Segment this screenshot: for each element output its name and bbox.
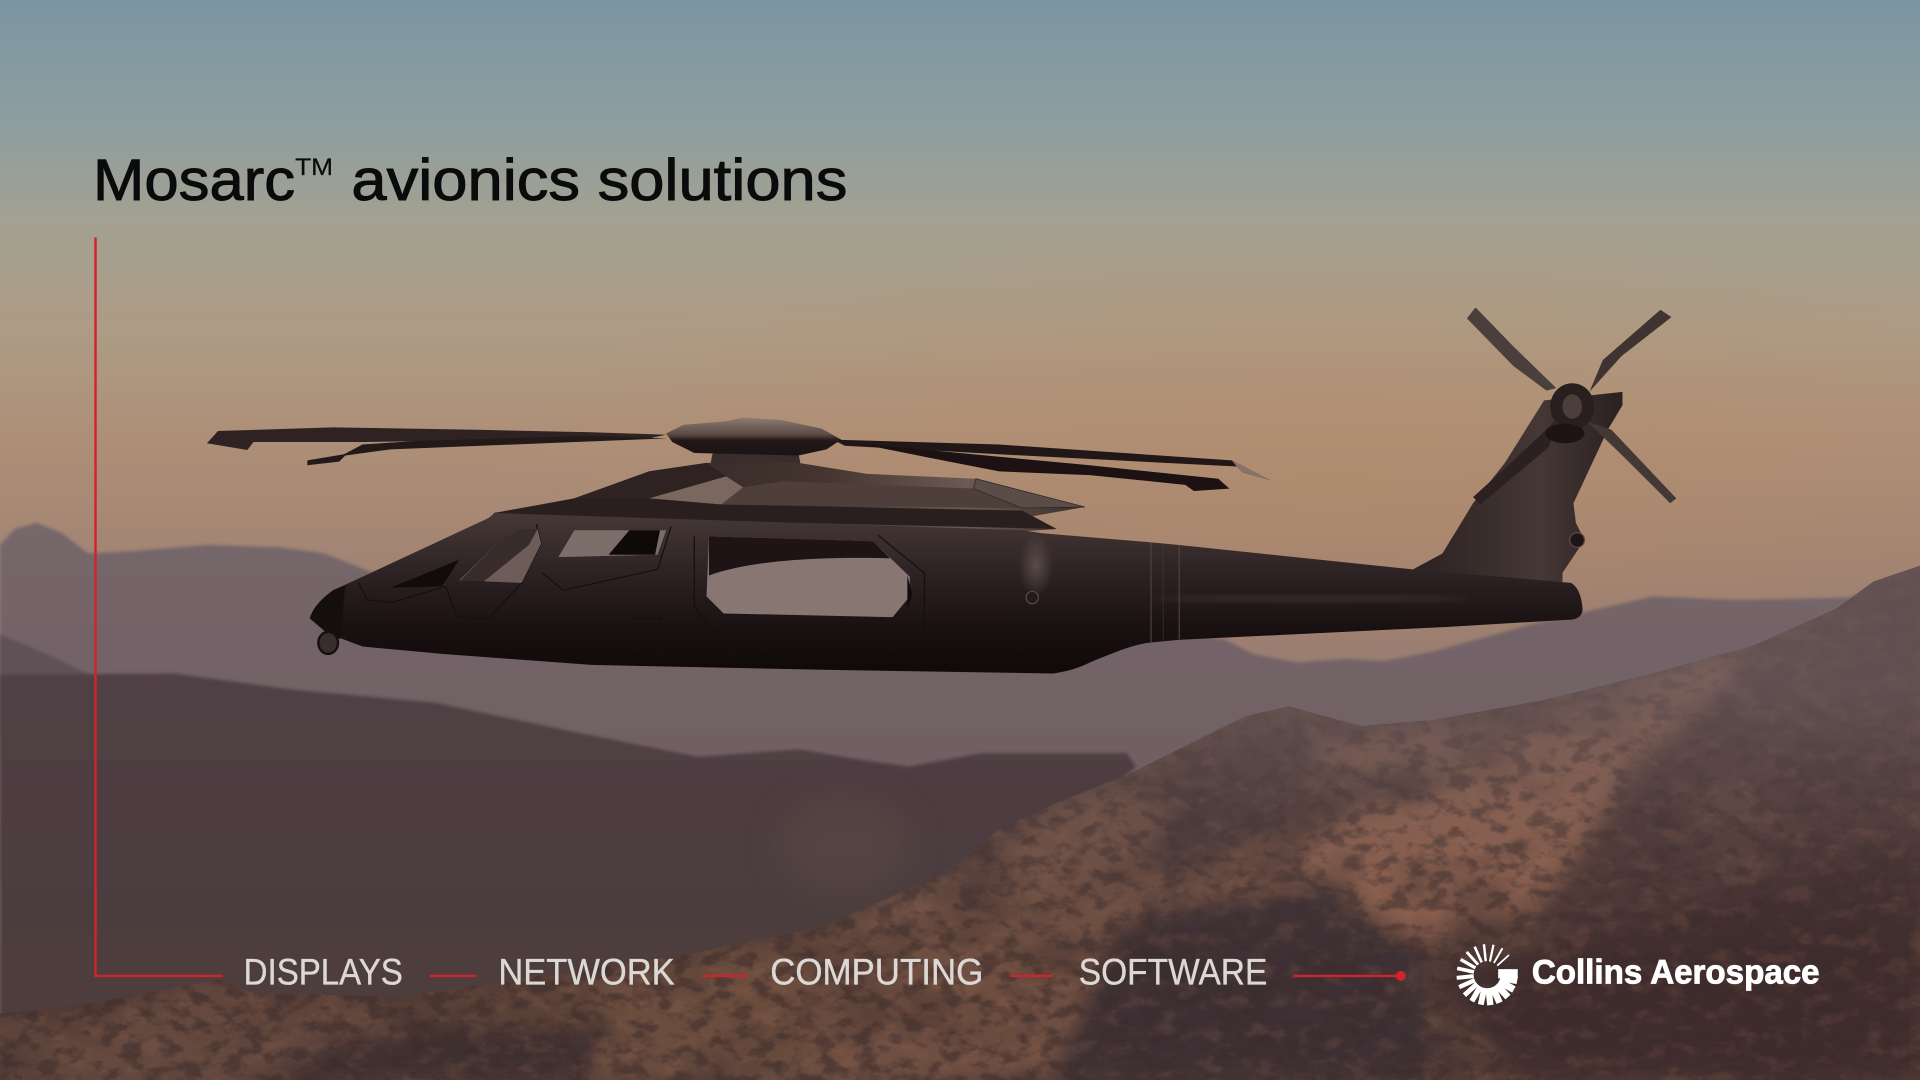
helicopter <box>207 307 1676 673</box>
fuselage highlights <box>1019 534 1469 602</box>
rotor hub <box>666 418 841 456</box>
fuselage rivet <box>1026 591 1038 604</box>
cockpit window <box>459 528 541 583</box>
chin turret <box>318 632 338 654</box>
title: TM <box>295 154 333 181</box>
icon: sunburst <box>1457 944 1518 1005</box>
Collins Aerospace logo <box>1457 944 1820 1005</box>
door outlines <box>349 524 924 665</box>
cabin window <box>707 536 912 617</box>
label: software: SOFTWARE <box>1079 951 1267 992</box>
label: network: NETWORK <box>498 951 675 992</box>
red timeline connector <box>96 238 1406 981</box>
main rotor left blades <box>207 427 667 465</box>
side window <box>558 530 666 557</box>
tail rotor <box>1467 307 1676 547</box>
tail boom bands <box>1151 542 1179 643</box>
label: computing: COMPUTING <box>770 951 983 992</box>
windscreen <box>391 560 459 588</box>
engine cowling roof <box>493 463 1085 531</box>
title: avionics solutions <box>351 148 847 213</box>
title: Mosarc <box>93 148 295 213</box>
label: displays: DISPLAYS <box>244 951 403 992</box>
tail fin <box>1413 392 1622 584</box>
wordmark: Collins Aerospace <box>1532 953 1820 991</box>
fuselage <box>310 513 1583 673</box>
main rotor right blades <box>833 440 1270 491</box>
nose cap <box>310 585 345 639</box>
mountain landscape <box>0 523 1920 1080</box>
engine air intake grille <box>973 479 1085 508</box>
title <box>93 148 847 213</box>
rotor mast <box>710 453 801 465</box>
